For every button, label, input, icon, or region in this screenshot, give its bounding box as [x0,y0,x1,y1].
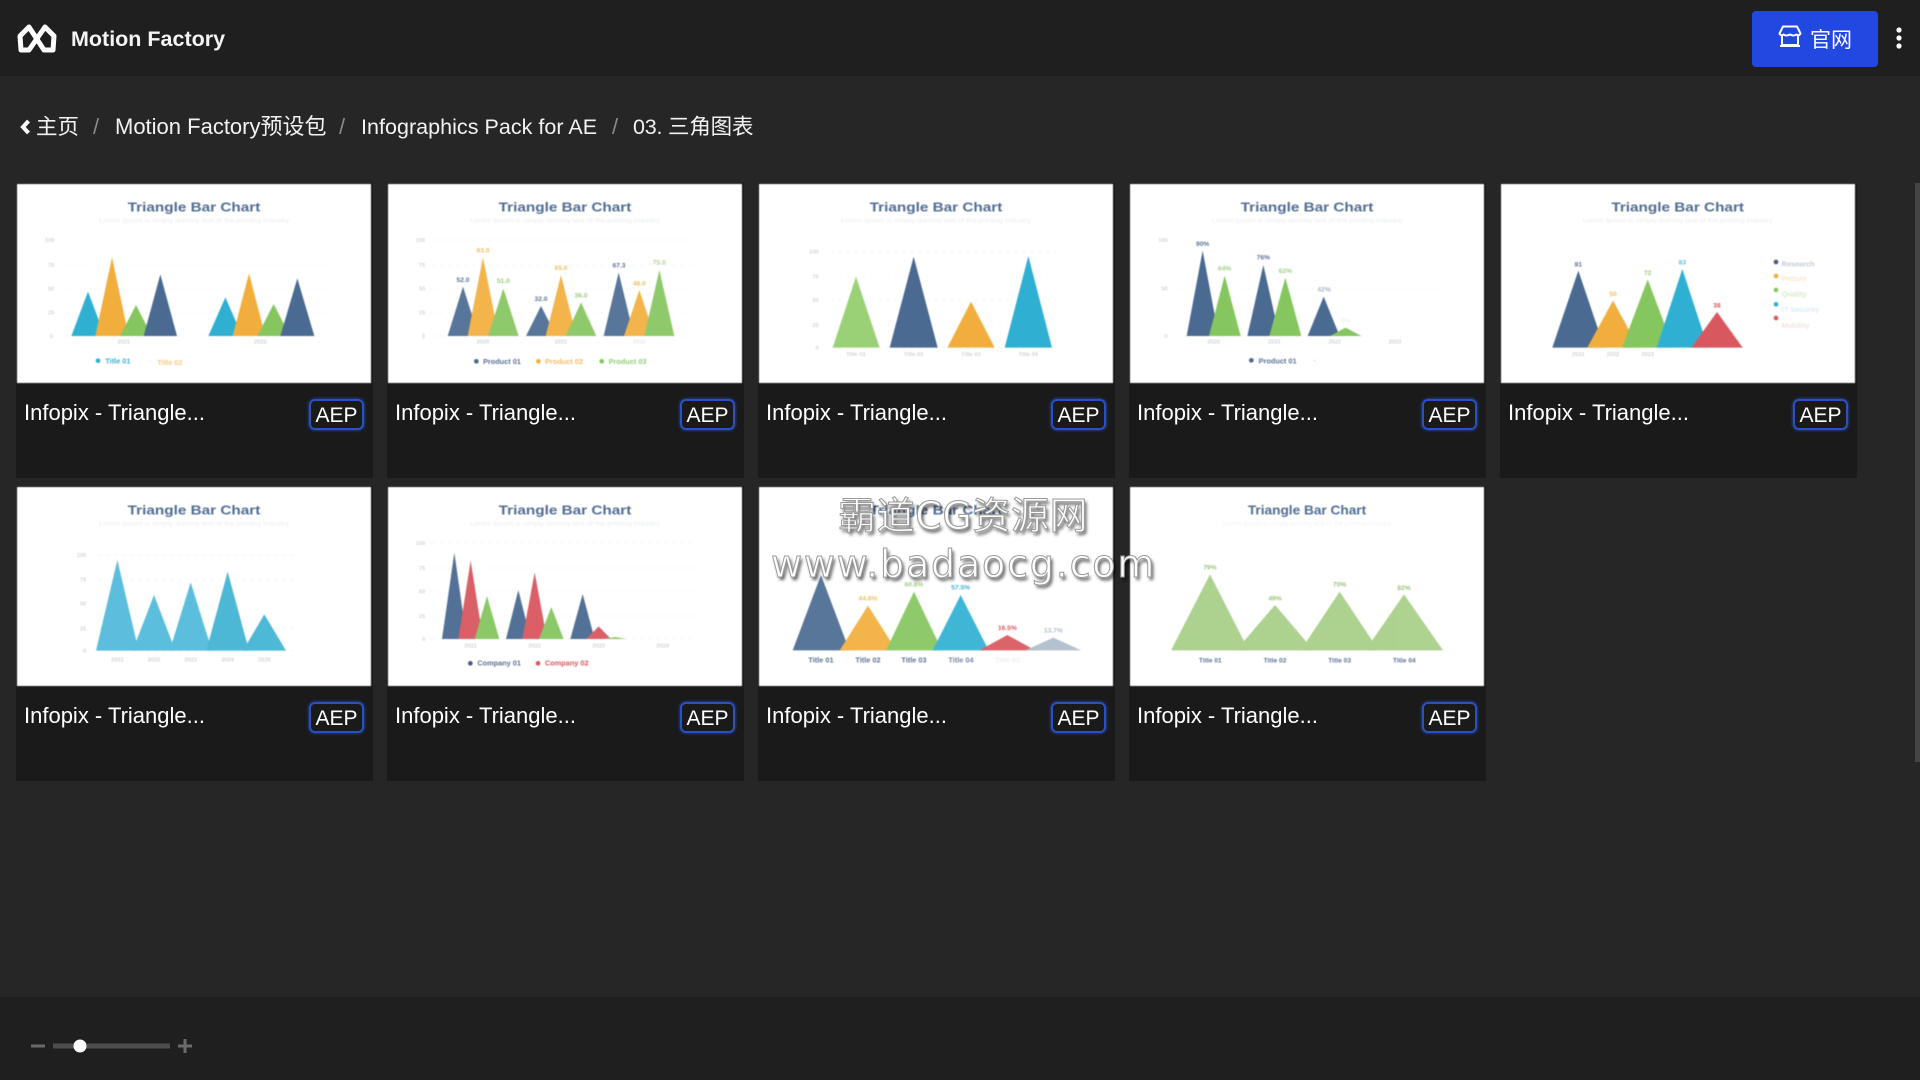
chart: four titled triangles: Title 04 [1019,352,1039,358]
chart: companies by year: 75 [419,566,425,572]
chart: companies by year: Lorem Ipsum is simply dummy text of the printing industry [470,522,660,528]
icon: storefront [1778,26,1802,47]
chart: companies by year: 100 [416,541,425,547]
chart: six overlapping triangles: Title 01 [808,655,834,664]
chart: five overlapping triangles with legend [1501,184,1855,383]
chart: grouped triangles 2021-2022: 0 [50,334,53,340]
chart: three products by year: Product 02 [545,357,583,366]
chart: grouped triangles 2021-2022: 100 [45,238,54,244]
card 1 [16,183,373,478]
chart: paired triangles 2020-2023: 2020 [1207,340,1220,346]
chart: five overlapping triangles with legend: 50 [1609,291,1617,298]
chart: paired triangles 2020-2023: Lorem Ipsum is simply dummy text of the printing industry [1212,218,1402,224]
chart: paired triangles 2020-2023: 100 [1158,238,1168,244]
chart: six overlapping triangles: 44.6% [859,596,878,603]
chart: companies by year: 25 [419,614,425,620]
chart: paired triangles 2020-2023: 42% [1317,287,1331,294]
format badge: AEP [315,707,358,730]
icon: more menu dots [1896,27,1902,49]
chart: paired triangles 2020-2023: 9% [1341,318,1351,325]
chart: green triangles with percentages: 70% [1333,582,1346,589]
format badge [1051,702,1106,733]
chart: three products by year: 2020 [477,340,489,346]
icon: back chevron [20,120,30,134]
chart: five overlapping triangles with legend: Lorem Ipsum is simply dummy text of the printing industry [1583,218,1773,224]
chart: cyan triangles 2021-2025: 2021 [111,657,124,663]
chart: cyan triangles 2021-2025: 0 [83,649,86,655]
chart: three products by year: Lorem Ipsum is simply dummy text of the printing industry [470,218,660,224]
chart: five overlapping triangles with legend: Quality [1782,289,1807,298]
bottom toolbar [0,997,1920,1080]
chart: four titled triangles [759,184,1113,383]
chart: green triangles with percentages: Title 03 [1328,657,1351,664]
chart: paired triangles 2020-2023: 62% [1279,268,1292,275]
chart: six overlapping triangles: 57.5% [951,585,970,592]
chart: cyan triangles 2021-2025: 100 [77,553,86,559]
chart: five overlapping triangles with legend: 81 [1575,261,1582,268]
chart: six overlapping triangles: 16.5% [998,625,1017,632]
chart: three products by year: 36.0 [575,292,588,299]
chart: grouped triangles 2021-2022: Title 02 [157,358,182,367]
chart: six overlapping triangles: Title 04 [948,655,974,664]
chart: six overlapping triangles: 13.7% [1044,628,1063,635]
watermark: site url: www.badaocg.com [771,542,1156,586]
crumb: home: 主页 [36,115,79,139]
chart: five overlapping triangles with legend: 2023 [1641,352,1654,358]
card title: Infopix - Triangle... [1137,703,1318,728]
breadcrumb navigation: / [339,114,345,139]
chart: cyan triangles 2021-2025: Lorem Ipsum is simply dummy text of the printing industry [99,522,289,528]
card 6 [16,486,373,781]
chart: cyan triangles 2021-2025: 2025 [258,657,271,663]
chart: companies by year: 2023 [592,643,605,649]
format badge: AEP [315,404,358,427]
card title: Infopix - Triangle... [1137,400,1318,425]
card 9 [1129,486,1486,781]
card title: Infopix - Triangle... [766,703,947,728]
official site button [1752,11,1878,67]
chart: six overlapping triangles: Title 03 [901,655,927,664]
chart: three products by year: 2021 [555,340,567,346]
breadcrumb navigation [20,114,753,139]
chart: three products by year: 67.3 [613,262,626,269]
chart: companies by year: Company 01 [477,659,521,668]
chart: cyan triangles 2021-2025: 25 [80,626,86,632]
chart: paired triangles 2020-2023: 0 [1165,334,1168,340]
chart: cyan triangles 2021-2025: 75 [80,578,86,584]
format badge: AEP [1428,707,1471,730]
chart: four titled triangles: Title 03 [961,352,981,358]
chart: five overlapping triangles with legend: 72 [1644,270,1652,277]
format badge [680,399,735,430]
card 2 [387,183,744,478]
chart: three products by year: 32.0 [535,296,548,303]
card title: Infopix - Triangle... [395,703,576,728]
chart: six overlapping triangles: Title 05 [995,655,1020,664]
chart: three products by year: 25 [419,311,425,317]
format badge [1422,399,1477,430]
format badge: AEP [1428,404,1471,427]
chart: paired triangles 2020-2023: Triangle Bar Chart [1241,201,1374,215]
chart: five overlapping triangles with legend: Triangle Bar Chart [1611,201,1745,215]
chart: three products by year: Product 01 [483,357,521,366]
chart: paired triangles 2020-2023: 2021 [1268,340,1281,346]
chart: cyan triangles 2021-2025: 2023 [184,657,197,663]
chart: green triangles with percentages: Title 02 [1264,657,1287,664]
chart: six overlapping triangles: Triangle Bar Chart [870,504,1003,518]
chart: five overlapping triangles with legend: 2021 [1572,352,1585,358]
card title: Infopix - Triangle... [24,703,205,728]
chart: four titled triangles: 25 [812,323,819,329]
icon: Motion Factory logo [18,24,56,52]
chart: companies by year: 50 [419,590,425,596]
format badge: AEP [686,707,729,730]
top header bar [0,0,1920,76]
chart: paired triangles 2020-2023: 76% [1257,254,1270,261]
format badge: AEP [1799,404,1842,427]
chart: four titled triangles: 100 [809,250,819,256]
chart: companies by year: 2024 [656,643,670,649]
chart: green triangles with percentages: Title 01 [1199,657,1222,664]
chart: four titled triangles: Title 01 [846,352,866,358]
chart: companies by year: 2021 [464,643,477,649]
chart: green triangles with percentages: Triangle Bar Chart [1248,504,1367,518]
chart: paired triangles 2020-2023: Product 01 [1259,356,1297,365]
chart: three products by year: 0 [422,334,425,340]
chart: five overlapping triangles with legend: IT Security [1782,305,1820,314]
card 5 [1500,183,1857,478]
chart: paired triangles 2020-2023: 50 [1161,286,1168,292]
chart: four titled triangles: 50 [812,298,819,304]
chart: six overlapping triangles [759,487,1113,686]
chart: grouped triangles 2021-2022: 75 [48,263,54,269]
card title: Infopix - Triangle... [766,400,947,425]
chart: five overlapping triangles with legend: 2022 [1607,352,1619,358]
chart: cyan triangles 2021-2025: Triangle Bar Chart [128,504,261,518]
button label: 官网 [1810,29,1852,52]
chart: three products by year: 50 [419,286,425,292]
chart: companies by year [388,487,742,686]
chart: green triangles with percentages: Lorem Ipsum is simply dummy text of the printing industry [1223,522,1391,528]
chart: grouped triangles 2021-2022: Title 01 [105,356,130,365]
chart: three products by year: Product 03 [609,357,647,366]
chart: six overlapping triangles: Title 02 [855,655,881,664]
format badge [309,702,364,733]
chart: three products by year: 2022 [633,340,646,346]
chart: companies by year: Company 02 [545,659,589,668]
chart: grouped triangles 2021-2022: 25 [48,311,54,317]
card title: Infopix - Triangle... [1508,400,1689,425]
chart: four titled triangles: Title 02 [904,352,923,358]
zoom slider [31,1039,192,1053]
card title: Infopix - Triangle... [24,400,205,425]
watermark: site name: 霸道CG资源网 [838,494,1088,538]
chart: companies by year: 2022 [528,643,541,649]
brand name: Motion Factory [71,27,225,51]
crumb: pack: Infographics Pack for AE [361,115,597,139]
crumb: current: 03. 三角图表 [633,115,753,139]
chart: green triangles with percentages: 49% [1268,595,1282,602]
chart: four titled triangles: Triangle Bar Chart [870,201,1003,215]
card 4 [1129,183,1486,478]
format badge: AEP [1057,707,1100,730]
chart: paired triangles 2020-2023: 90% [1196,241,1209,248]
chart: cyan triangles 2021-2025: 2024 [221,657,235,663]
card 8 [758,486,1115,781]
format badge [680,702,735,733]
chart: cyan triangles 2021-2025: 50 [80,602,86,608]
breadcrumb navigation: / [612,114,618,139]
format badge: AEP [686,404,729,427]
chart: three products by year: 65.0 [555,265,568,272]
chart: three products by year: 75.0 [653,260,666,267]
card 7 [387,486,744,781]
card 3 [758,183,1115,478]
chart: cyan triangles 2021-2025 [17,487,371,686]
format badge [1051,399,1106,430]
chart: four titled triangles: 75 [812,275,819,281]
chart: three products by year: 48.0 [633,280,646,287]
chart: five overlapping triangles with legend: 38 [1713,302,1721,309]
chart: five overlapping triangles with legend: Picture [1782,274,1807,283]
chart: paired triangles 2020-2023 [1130,184,1484,383]
chart: green triangles with percentages [1130,487,1484,686]
chart: four titled triangles: 0 [816,346,819,352]
chart: grouped triangles 2021-2022: Triangle Bar Chart [128,201,261,215]
chart: grouped triangles 2021-2022: Lorem Ipsum is simply dummy text of the printing industry [99,218,289,224]
chart: paired triangles 2020-2023: 2023 [1389,340,1401,346]
chart: paired triangles 2020-2023: 64% [1218,266,1231,273]
crumb: presets: Motion Factory预设包 [115,114,326,139]
chart: three products by year: 52.0 [457,277,470,284]
format badge [1422,702,1477,733]
chart: five overlapping triangles with legend: Research [1782,259,1815,268]
chart: five overlapping triangles with legend: Mobility [1782,321,1810,330]
card title: Infopix - Triangle... [395,400,576,425]
chart: green triangles with percentages: 82% [1397,585,1411,592]
format badge [309,399,364,430]
chart: four titled triangles: Lorem Ipsum is simply dummy text of the printing industry [841,218,1031,224]
chart: three products by year: 51.0 [497,278,510,285]
scrollbar [1915,183,1920,762]
chart: grouped triangles 2021-2022: 2021 [117,340,130,346]
chart: grouped triangles 2021-2022: 2022 [254,340,267,346]
chart: companies by year: Triangle Bar Chart [499,504,632,518]
chart: companies by year: 0 [422,637,425,643]
chart: grouped triangles 2021-2022: 50 [48,286,54,292]
chart: six overlapping triangles: 60.8% [905,581,924,588]
chart: green triangles with percentages: 79% [1203,565,1217,572]
format badge: AEP [1057,404,1100,427]
chart: three products by year [388,184,742,383]
chart: three products by year: Triangle Bar Chart [499,201,632,215]
chart: three products by year: 75 [419,263,425,269]
chart: five overlapping triangles with legend: 83 [1679,259,1686,266]
chart: green triangles with percentages: Title 04 [1393,657,1416,664]
chart: three products by year: 100 [416,238,425,244]
chart: three products by year: 83.0 [477,248,490,255]
format badge [1793,399,1848,430]
chart: grouped triangles 2021-2022 [17,184,371,383]
breadcrumb navigation: / [93,114,99,139]
chart: cyan triangles 2021-2025: 2022 [148,657,160,663]
chart: paired triangles 2020-2023: 2022 [1328,340,1341,346]
